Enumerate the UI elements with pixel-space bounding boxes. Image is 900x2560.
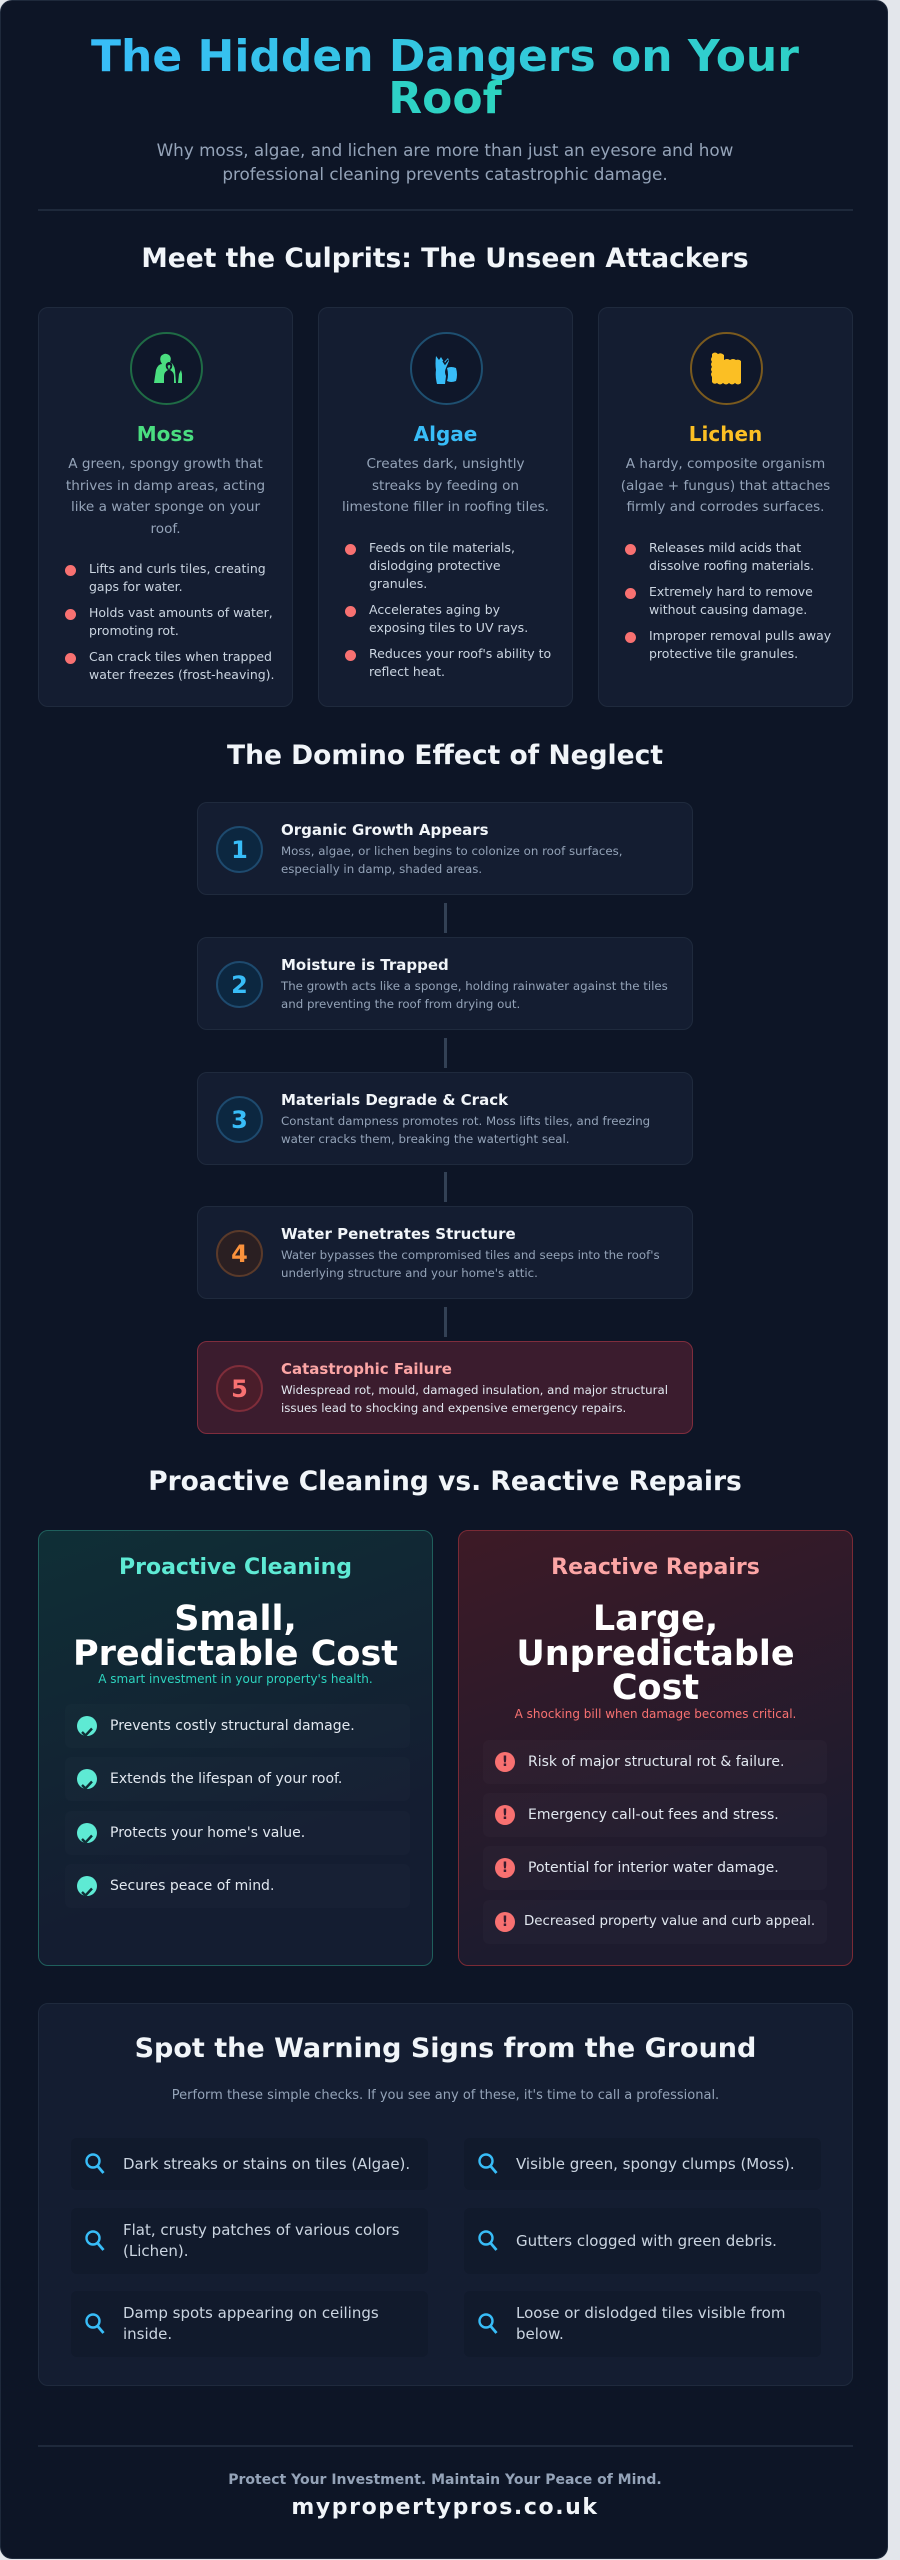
panel: proactive: Protects your home's value. bbox=[110, 1825, 305, 1841]
panel: lichen: Improper removal pulls away protective tile granules. bbox=[649, 628, 831, 661]
step 5: issues lead to shocking and expensive emergency repairs. bbox=[281, 1401, 626, 1415]
step 4 bbox=[197, 1206, 693, 1299]
step 1: especially in damp, shaded areas. bbox=[281, 862, 482, 876]
panel: warning signs: Damp spots appearing on ceilings inside. bbox=[123, 2304, 379, 2343]
panel: warning signs: Spot the Warning Signs from the Ground bbox=[135, 2033, 756, 2064]
panel: algae: Accelerates aging by exposing tiles to UV rays. bbox=[369, 602, 528, 635]
panel: proactive: Secures peace of mind. bbox=[110, 1878, 274, 1894]
panel: lichen: Releases mild acids that dissolve roofing materials. bbox=[649, 540, 814, 573]
panel: lichen: firmly and corrodes surfaces. bbox=[626, 499, 824, 515]
step 1: 1 bbox=[231, 836, 248, 864]
step 4: 4 bbox=[231, 1240, 248, 1268]
icon: moss bbox=[130, 332, 203, 405]
panel: moss: thrives in damp areas, acting bbox=[66, 478, 265, 494]
panel: reactive bbox=[458, 1530, 853, 1966]
step 2 bbox=[197, 937, 693, 1030]
panel: lichen: Extremely hard to remove without causing damage. bbox=[649, 584, 813, 617]
panel: reactive: Cost bbox=[612, 1668, 699, 1708]
heading: domino: The Domino Effect of Neglect bbox=[227, 740, 663, 771]
panel: proactive: Extends the lifespan of your roof. bbox=[110, 1771, 342, 1787]
step 3 bbox=[197, 1072, 693, 1165]
panel: warning signs: Dark streaks or stains on tiles (Algae). bbox=[123, 2154, 410, 2172]
panel: proactive: A smart investment in your property's health. bbox=[98, 1672, 373, 1686]
footer tagline: Protect Your Investment. Maintain Your Peace of Mind. bbox=[228, 2472, 662, 2488]
panel: proactive: Proactive Cleaning bbox=[119, 1555, 352, 1580]
panel: proactive: Predictable Cost bbox=[73, 1634, 398, 1674]
step 1: Moss, algae, or lichen begins to colonize on roof surfaces, bbox=[281, 844, 622, 858]
panel: reactive: Reactive Repairs bbox=[551, 1555, 760, 1580]
panel: warning signs: Visible green, spongy clumps (Moss). bbox=[516, 2154, 795, 2172]
panel: algae: limestone filler in roofing tiles. bbox=[342, 499, 549, 515]
icon: algae bbox=[410, 332, 483, 405]
step 5: Catastrophic Failure bbox=[281, 1360, 452, 1378]
footer domain: mypropertypros.co.uk bbox=[291, 2495, 599, 2520]
title: Roof bbox=[388, 73, 502, 124]
panel: lichen bbox=[598, 307, 853, 707]
panel: reactive: Potential for interior water damage. bbox=[528, 1860, 779, 1876]
panel: warning signs: Loose or dislodged tiles visible from below. bbox=[516, 2304, 785, 2343]
panel: lichen: Lichen bbox=[689, 422, 762, 446]
panel: reactive: A shocking bill when damage becomes critical. bbox=[515, 1707, 796, 1721]
panel: reactive: Risk of major structural rot & failure. bbox=[528, 1754, 784, 1770]
panel: proactive bbox=[38, 1530, 433, 1966]
panel: reactive: Unpredictable bbox=[516, 1634, 795, 1674]
panel: reactive: Decreased property value and curb appeal. bbox=[524, 1914, 815, 1929]
panel: reactive: ! bbox=[502, 1914, 508, 1930]
step 5 bbox=[197, 1341, 693, 1434]
step 3: 3 bbox=[231, 1106, 248, 1134]
title: The Hidden Dangers on Your bbox=[91, 31, 799, 82]
panel: warning signs bbox=[38, 2003, 853, 2386]
panel: moss: like a water sponge on your bbox=[71, 499, 260, 515]
panel: lichen: (algae + fungus) that attaches bbox=[621, 478, 830, 494]
step 1 bbox=[197, 802, 693, 895]
step 2: Moisture is Trapped bbox=[281, 956, 449, 974]
panel: moss: Moss bbox=[137, 422, 194, 446]
panel: algae: streaks by feeding on bbox=[372, 478, 519, 494]
panel: reactive: ! bbox=[502, 1754, 508, 1770]
step 3: water cracks them, breaking the watertight seal. bbox=[281, 1132, 570, 1146]
panel: reactive: Emergency call-out fees and stress. bbox=[528, 1807, 779, 1823]
panel: reactive: ! bbox=[502, 1807, 508, 1823]
step 4: underlying structure and your home's attic. bbox=[281, 1266, 538, 1280]
step 2: The growth acts like a sponge, holding rainwater against the tiles bbox=[281, 979, 668, 993]
step 4: Water bypasses the compromised tiles and seeps into the roof's bbox=[281, 1248, 660, 1262]
step 5: 5 bbox=[231, 1375, 248, 1403]
subtitle: Why moss, algae, and lichen are more than just an eyesore and how professional cleaning prevents catastrophic damage. bbox=[157, 140, 733, 184]
panel: moss bbox=[38, 307, 293, 707]
heading: culprits: Meet the Culprits: The Unseen Attackers bbox=[141, 243, 749, 274]
panel: moss: A green, spongy growth that bbox=[68, 456, 263, 472]
panel: algae: Algae bbox=[414, 422, 477, 446]
step 1: Organic Growth Appears bbox=[281, 821, 489, 839]
step 4: Water Penetrates Structure bbox=[281, 1225, 516, 1243]
panel: algae bbox=[318, 307, 573, 707]
step 5: Widespread rot, mould, damaged insulation, and major structural bbox=[281, 1383, 668, 1397]
panel: proactive: Prevents costly structural damage. bbox=[110, 1718, 355, 1734]
icon: lichen bbox=[690, 332, 763, 405]
panel: algae: Creates dark, unsightly bbox=[366, 456, 525, 472]
panel: warning signs: Gutters clogged with green debris. bbox=[516, 2232, 777, 2250]
heading: comparison: Proactive Cleaning vs. Reactive Repairs bbox=[148, 1466, 742, 1497]
panel: moss: roof. bbox=[150, 521, 181, 537]
step 3: Materials Degrade & Crack bbox=[281, 1091, 508, 1109]
panel: proactive: Small, bbox=[174, 1599, 297, 1639]
panel: warning signs: Perform these simple checks. If you see any of these, it's time to call a professional. bbox=[172, 2088, 719, 2103]
panel: algae: Feeds on tile materials, dislodging protective granules. bbox=[369, 540, 515, 591]
panel: warning signs: Flat, crusty patches of various colors (Lichen). bbox=[123, 2221, 399, 2260]
panel: moss: Holds vast amounts of water, promoting rot. bbox=[89, 605, 273, 638]
panel: moss: Can crack tiles when trapped water freezes (frost-heaving). bbox=[89, 649, 275, 682]
step 3: Constant dampness promotes rot. Moss lifts tiles, and freezing bbox=[281, 1114, 650, 1128]
panel: lichen: A hardy, composite organism bbox=[626, 456, 825, 472]
panel: algae: Reduces your roof's ability to reflect heat. bbox=[369, 646, 551, 679]
step 2: 2 bbox=[231, 971, 248, 999]
panel: reactive: Large, bbox=[593, 1599, 718, 1639]
step 2: and preventing the roof from drying out. bbox=[281, 997, 520, 1011]
panel: reactive: ! bbox=[502, 1860, 508, 1876]
title bbox=[91, 31, 799, 124]
panel: moss: Lifts and curls tiles, creating gaps for water. bbox=[89, 561, 266, 594]
